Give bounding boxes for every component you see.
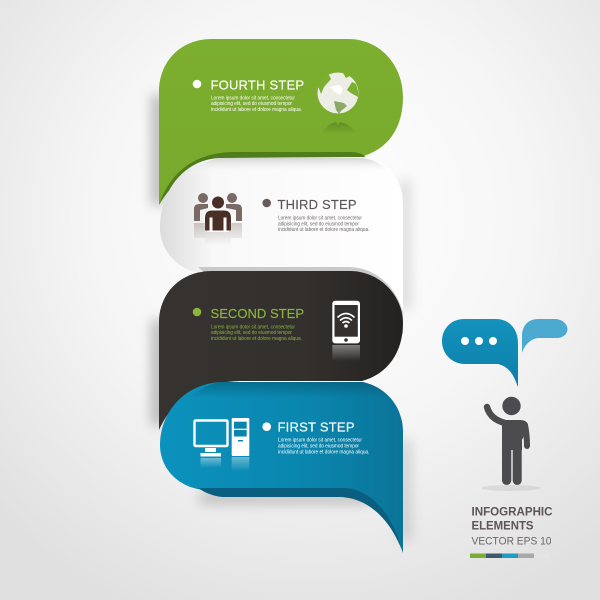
white ribbon <box>160 157 403 335</box>
blue ribbon <box>160 382 403 553</box>
panel: fourth step <box>159 39 403 205</box>
bullet <box>193 80 201 88</box>
green ribbon <box>159 39 403 205</box>
icon: computer <box>194 418 249 471</box>
panel: second step <box>159 271 403 430</box>
heading: FIRST STEP <box>278 420 354 435</box>
icon: globe <box>318 71 358 134</box>
body text: incididunt ut labore et dolore magna aliqua. <box>211 107 302 113</box>
bullet <box>193 308 201 316</box>
body text: adipisicing elit, sed do eiusmod tempor <box>278 444 359 450</box>
dark ribbon <box>159 271 403 430</box>
color legend <box>470 554 550 558</box>
body text: Lorem ipsum dolor sit amet, consectetur <box>211 95 295 101</box>
body text <box>278 216 370 233</box>
heading: SECOND STEP <box>210 306 304 321</box>
bullet <box>262 422 271 431</box>
panel: first step <box>160 382 403 553</box>
body text: incididunt ut labore et dolore magna aliqua. <box>278 449 370 455</box>
body text: incididunt ut labore et dolore magna aliqua. <box>278 227 370 233</box>
dots <box>461 337 497 345</box>
title: VECTOR EPS 10 <box>472 536 552 548</box>
body text <box>278 438 370 455</box>
body text <box>211 324 302 342</box>
speech bubbles <box>442 319 568 387</box>
body text: adipisicing elit, sed do eiusmod tempor <box>278 221 359 227</box>
bullet <box>262 199 271 207</box>
body text: adipisicing elit, sed do eiusmod tempor <box>211 101 292 107</box>
body text: Lorem ipsum dolor sit amet, consectetur <box>278 438 362 444</box>
title: INFOGRAPHIC <box>472 504 553 518</box>
heading: FOURTH STEP <box>210 78 304 92</box>
dark bubble <box>442 319 518 387</box>
body text: Lorem ipsum dolor sit amet, consectetur <box>278 216 362 222</box>
title: ELEMENTS <box>472 518 534 532</box>
body text <box>211 95 302 113</box>
light bubble <box>522 319 568 353</box>
heading: THIRD STEP <box>278 197 356 212</box>
body text: Lorem ipsum dolor sit amet, consectetur <box>211 324 295 330</box>
globe reflection <box>322 122 357 134</box>
title <box>472 504 553 548</box>
icon: smartphone <box>332 301 360 361</box>
panel: third step <box>160 157 403 335</box>
panel shadows <box>152 95 410 540</box>
body text: adipisicing elit, sed do eiusmod tempor <box>211 330 292 336</box>
icon: people <box>194 193 242 245</box>
body text: incididunt ut labore et dolore magna aliqua. <box>211 336 302 342</box>
icon: person <box>481 397 541 491</box>
